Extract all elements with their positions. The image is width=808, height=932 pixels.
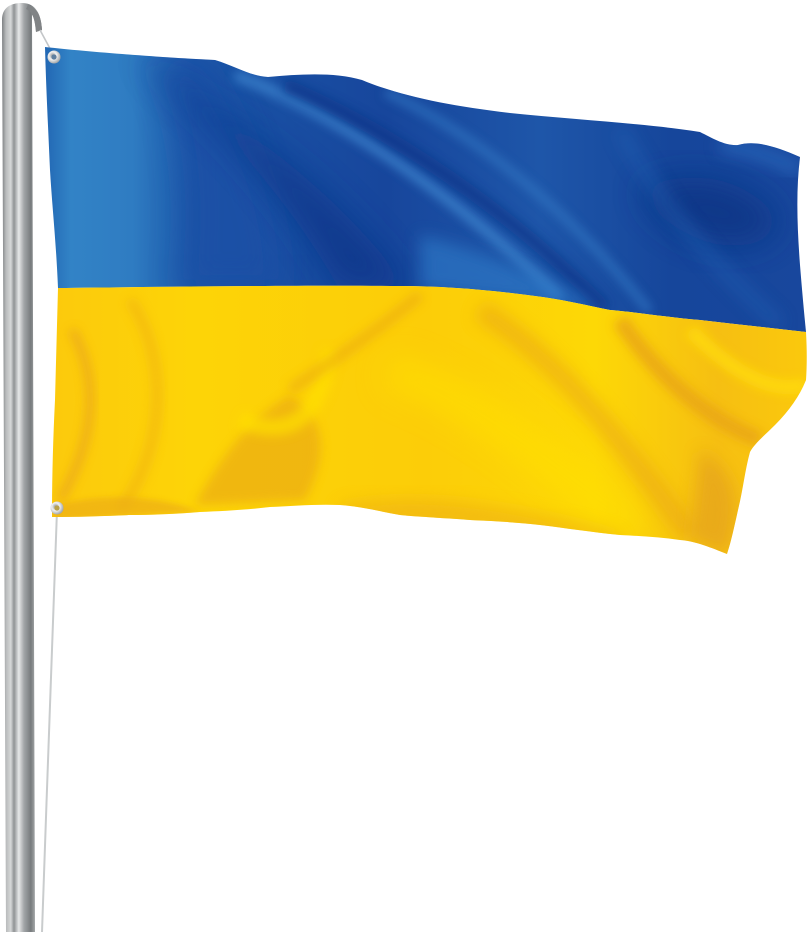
rope: bottom	[42, 510, 57, 932]
eyelet: bottom	[50, 502, 64, 514]
flag	[40, 40, 808, 560]
yellow stripe	[40, 280, 808, 560]
rope: top	[40, 30, 54, 56]
flagpole	[2, 3, 42, 932]
blue stripe	[40, 40, 808, 340]
fold highlights in blue	[150, 60, 280, 290]
eyelet: top	[48, 50, 60, 64]
fold shading in yellow	[60, 330, 90, 500]
